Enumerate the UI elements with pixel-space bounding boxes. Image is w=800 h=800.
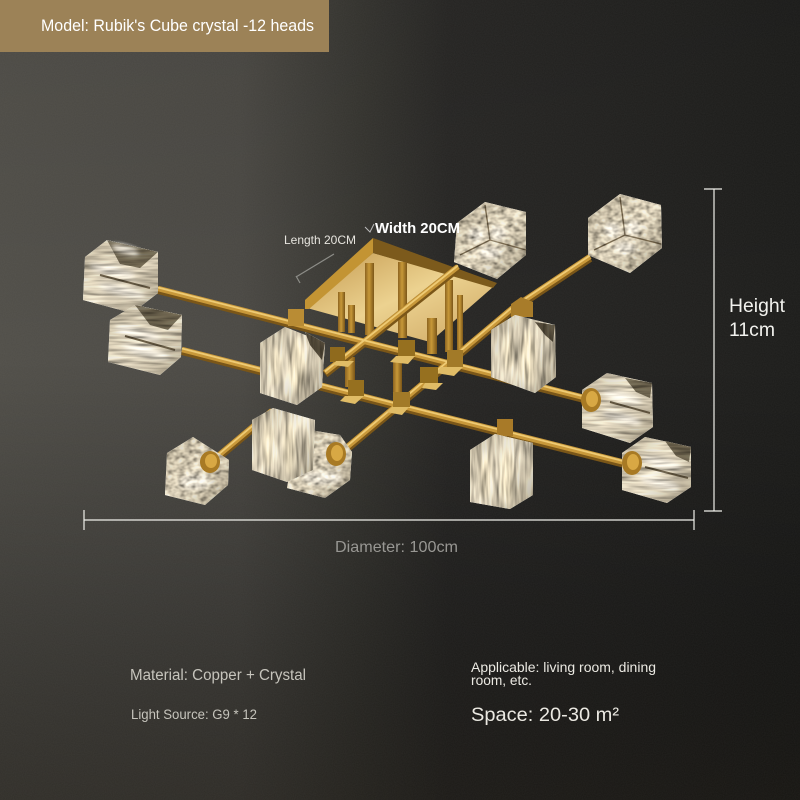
light source text: Light Source: G9 * 12 [131,707,257,722]
crystal cube: right [582,373,653,443]
ceiling canopy plate [305,238,497,342]
crystal cube: bottom right [470,434,533,509]
crystal cube: bottom center left [252,408,315,482]
chandelier [83,194,691,509]
space text: Space: 20-30 m² [471,704,620,726]
crystal cube: top right [588,194,662,273]
width tick [365,224,374,232]
brass knob: right [581,388,601,412]
applicable text [471,659,656,688]
crystal cube: center left [260,327,325,405]
crystal cube: top center [454,202,526,279]
crystal cube: lower right [622,437,691,503]
width label: Width 20CM [375,220,460,237]
crystal cube: bottom center [287,430,352,498]
model banner [0,0,329,52]
diameter label: Diameter: 100cm [335,539,458,556]
arm rods [158,256,625,464]
brass knob: bottom left [200,451,220,473]
crystal cube: bottom left [165,437,229,505]
applicable text: Applicable: living room, dining [471,659,656,675]
diameter dimension line [84,510,694,530]
height label [729,296,786,341]
material text: Material: Copper + Crystal [130,667,306,684]
crystal cube: center right [491,315,556,393]
crystal cube: left [108,305,182,375]
model banner: Model: Rubik's Cube crystal -12 heads [41,17,314,35]
brass knob: lower right [622,451,642,475]
length label: Length 20CM [284,233,356,247]
applicable text: room, etc. [471,672,532,688]
height label: Height [729,296,786,317]
support posts [338,262,463,402]
height label: 11cm [729,320,775,341]
height dimension line [704,189,722,511]
crystal cube: top left [83,240,158,313]
length pointer [296,254,334,283]
brass knob: bottom center [326,442,346,466]
rod joints [288,297,533,436]
